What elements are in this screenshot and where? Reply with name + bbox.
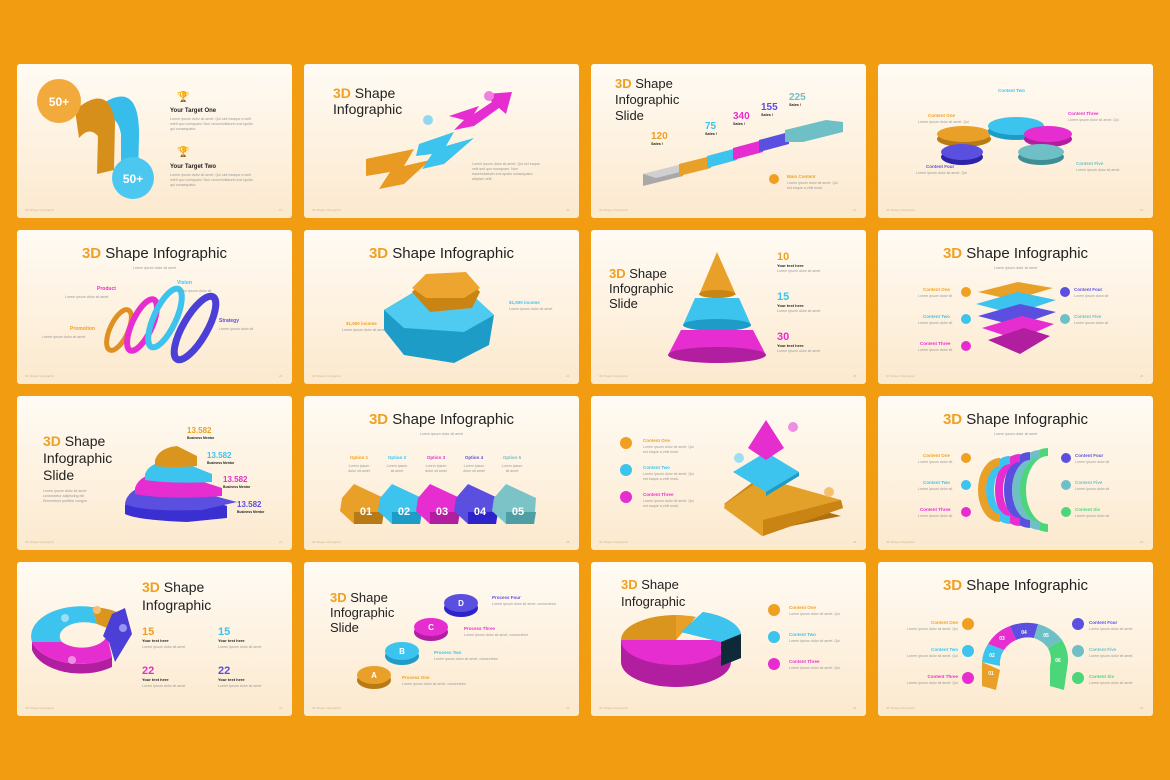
slide 14: ABCD cylinders: Lorem ipsum dolor sit amet, consectetur <box>434 657 499 661</box>
slide 2: arrows: 20 <box>566 208 570 212</box>
slide 15: 3D pie: Content One <box>789 605 816 610</box>
slide 4: discs: Lorem ipsum dolor sit amet. Qui <box>916 171 967 175</box>
slide 1: targets: 50+ <box>123 172 143 186</box>
slide 3: stairs: est eaque a velit modi. <box>787 186 823 190</box>
slide 1: targets: 🏆 <box>177 145 190 158</box>
slide 5: rings: Lorem ipsum dolor sit <box>177 289 211 293</box>
slide 13: donut: Your text here <box>218 677 245 682</box>
slide 4: discs: Lorem ipsum dolor sit amet. Qui <box>918 120 969 124</box>
slide 6: hexagon prism: Lorem ipsum dolor sit amet <box>509 307 552 311</box>
slide 5: rings: Lorem ipsum dolor sit amet <box>65 295 108 299</box>
slide 7: cone <box>591 230 866 384</box>
slide 7: cone: 10 <box>777 251 789 263</box>
slide 13: donut: Lorem ipsum dolor sit amet <box>218 645 261 649</box>
slide 3: stairs: Sales ! <box>733 122 745 126</box>
slide 12: rainbow arches: Lorem ipsum dolor sit <box>918 514 952 518</box>
slide 10: options blocks: 01 <box>360 506 372 518</box>
slide 7: cone: Lorem ipsum dolor sit amet <box>777 269 820 273</box>
slide 3: stairs: Sales ! <box>651 142 663 146</box>
slide 8: slabs: 3D Shape Infographic <box>886 374 916 378</box>
slide 11: pyramid: Lorem ipsum dolor sit amet. Qui <box>643 499 694 503</box>
slide 5: rings: Product <box>97 286 116 292</box>
slide 10: options blocks: 04 <box>474 506 487 518</box>
slide 13: donut: 22 <box>218 665 230 677</box>
slide 5: rings: 3D Shape Infographic <box>82 245 228 262</box>
slide 4: discs: 22 <box>1140 208 1144 212</box>
slide 13: donut: 15 <box>142 626 154 638</box>
slide 10: options blocks: Option 2 <box>388 455 407 460</box>
slide 9: stacked half discs: Slide <box>43 467 74 483</box>
slide 16: segmented arch: Lorem ipsum dolor sit amet. Qui <box>907 681 958 685</box>
slide 13: donut: Infographic <box>142 597 211 613</box>
slide 8: slabs: Lorem ipsum dolor sit <box>1074 294 1108 298</box>
slide 2: arrows: eaceholtaturin eos iqodio consequatur <box>472 172 534 176</box>
slide 15: 3D pie: Lorem ipsum dolor sit amet. Qui <box>789 666 840 670</box>
slide 5: rings: Vision <box>177 280 192 286</box>
slide 16: segmented arch: Content Six <box>1089 674 1114 679</box>
slide 1: targets <box>17 64 292 218</box>
slide 3: stairs: 3D Shape Infographic <box>599 208 629 212</box>
slide 10: options blocks: Option 1 <box>350 455 369 460</box>
slide 13: donut: 22 <box>142 665 154 677</box>
slide 12: rainbow arches: Content Four <box>1075 453 1103 458</box>
slide 14: ABCD cylinders: C <box>428 623 434 632</box>
slide 12: rainbow arches: Content One <box>923 453 950 458</box>
slide 5: rings: Promotion <box>70 326 95 332</box>
slide 10: options blocks: Lorem ipsum <box>426 464 446 468</box>
slide 12: rainbow arches: Lorem ipsum dolor sit <box>918 460 952 464</box>
slide 10: options blocks: Lorem ipsum <box>464 464 484 468</box>
slide 13: donut: Lorem ipsum dolor sit amet <box>218 684 261 688</box>
slide 14: ABCD cylinders: 32 <box>566 706 570 710</box>
slide 2: arrows: 3D Shape Infographic <box>312 208 342 212</box>
slide 10: options blocks: 03 <box>436 506 448 518</box>
slide 10: options blocks: sit amet <box>391 469 403 473</box>
slide 14: ABCD cylinders: Slide <box>330 620 359 635</box>
slide 3: stairs: Main Content <box>787 174 816 179</box>
slide 12: rainbow arches: 3D Shape Infographic <box>886 540 916 544</box>
slide 3: stairs: 225 <box>789 92 806 103</box>
slide 8: slabs: Lorem ipsum dolor sit amet <box>994 266 1037 270</box>
slide 8: slabs: 3D Shape Infographic <box>943 245 1089 262</box>
slide 14: ABCD cylinders: Lorem ipsum dolor sit amet, consectetur <box>464 633 529 637</box>
slide 7: cone: 3D Shape Infographic <box>599 374 629 378</box>
slide 4: discs: Content Four <box>926 164 954 169</box>
slide 16: segmented arch: Lorem ipsum dolor sit amet. <box>1089 627 1133 631</box>
slide 13: donut: Your text here <box>142 677 169 682</box>
slide 16: segmented arch: Content Four <box>1089 620 1117 625</box>
slide 2: arrows: Lorem ipsum dolor sit amet. Qui est eaque <box>472 162 540 166</box>
slide 12: rainbow arches: Lorem ipsum dolor sit <box>918 487 952 491</box>
slide 1: targets: 50+ <box>49 95 69 109</box>
slide 8: slabs: Content Five <box>1074 314 1102 319</box>
slide 15: 3D pie: 3D Shape <box>621 577 679 592</box>
slide 3: stairs: Slide <box>615 108 644 123</box>
slide 7: cone: 3D Shape <box>609 266 667 281</box>
slide 6: hexagon prism <box>304 230 579 384</box>
slide 6: hexagon prism: 3D Shape Infographic <box>312 374 342 378</box>
slide 1: targets: 3D Shape Infographic <box>25 208 55 212</box>
slide 14: ABCD cylinders: Process Three <box>464 626 496 631</box>
slide 1: targets: 19 <box>279 208 283 212</box>
slide 16: segmented arch: 05 <box>1043 633 1049 639</box>
slide 16: segmented arch: Content Three <box>927 674 958 679</box>
slide 16: segmented arch: 3D Shape Infographic <box>943 577 1089 594</box>
slide 16: segmented arch: Content Two <box>931 647 958 652</box>
slide 14: ABCD cylinders: Lorem ipsum dolor sit amet, consectetur <box>402 682 467 686</box>
slide 12: rainbow arches: 30 <box>1140 540 1144 544</box>
slide 3: stairs <box>591 64 866 218</box>
slide 14: ABCD cylinders <box>304 562 579 716</box>
slide 10: options blocks: 05 <box>512 506 524 518</box>
slide 3: stairs: 340 <box>733 111 750 122</box>
slide 10: options blocks: 3D Shape Infographic <box>369 411 515 428</box>
slide 13: donut: Lorem ipsum dolor sit amet <box>142 645 185 649</box>
slide 7: cone: Your text here <box>777 263 804 268</box>
slide 1: targets: Your Target Two <box>170 164 216 170</box>
slide 2: arrows: Infographic <box>333 101 402 117</box>
slide 7: cone: Infographic <box>609 281 674 296</box>
slide 11: pyramid: Content One <box>643 438 670 443</box>
slide 3: stairs: Infographic <box>615 92 680 107</box>
slide 16: segmented arch: Content One <box>931 620 958 625</box>
slide 3: stairs: 21 <box>853 208 857 212</box>
slide 15: 3D pie: Content Two <box>789 632 816 637</box>
slide 1: targets: mieti quo numquam. Non veoncholtaturin eos iqodio <box>170 122 253 126</box>
slide 11: pyramid: est eaque a velit modi. <box>643 477 679 481</box>
slide 4: discs: Lorem ipsum dolor sit amet. <box>1076 168 1120 172</box>
slide 9: stacked half discs: 3D Shape <box>43 433 105 449</box>
slide 13: donut: Lorem ipsum dolor sit amet <box>142 684 185 688</box>
slide 3: stairs: 120 <box>651 131 668 142</box>
slide 11: pyramid: 29 <box>853 540 857 544</box>
slide 9: stacked half discs: 13.582 <box>207 451 232 460</box>
slide 2: arrows: 3D Shape <box>333 85 395 101</box>
slide 14: ABCD cylinders: D <box>458 599 464 608</box>
slide 15: 3D pie <box>591 562 866 716</box>
slide 3: stairs: Sales ! <box>761 113 773 117</box>
slide 5: rings: 3D Shape Infographic <box>25 374 55 378</box>
slide 12: rainbow arches: Lorem ipsum dolor sit <box>1075 514 1109 518</box>
slide 8: slabs: Lorem ipsum dolor sit <box>918 348 952 352</box>
slide 9: stacked half discs: 13.582 <box>223 475 248 484</box>
slide 16: segmented arch: 02 <box>989 653 995 659</box>
slide 8: slabs: Lorem ipsum dolor sit <box>918 321 952 325</box>
slide 14: ABCD cylinders: 3D Shape <box>330 590 388 605</box>
slide 13: donut: Your text here <box>142 638 169 643</box>
slide 7: cone: 25 <box>853 374 857 378</box>
slide 3: stairs: 3D Shape <box>615 76 673 91</box>
slide 15: 3D pie: 33 <box>853 706 857 710</box>
slide 6: hexagon prism: $1,500 income <box>346 321 377 326</box>
slide 16: segmented arch: 06 <box>1055 658 1061 664</box>
slide 12: rainbow arches: Content Six <box>1075 507 1100 512</box>
slide 14: ABCD cylinders: Infographic <box>330 605 395 620</box>
slide 9: stacked half discs: consectetur adipiscing elit <box>43 494 84 498</box>
slide 14: ABCD cylinders: Process One <box>402 675 430 680</box>
slide 15: 3D pie: Infographic <box>621 594 686 609</box>
slide 12: rainbow arches: Content Two <box>923 480 950 485</box>
slide 16: segmented arch: Lorem ipsum dolor sit amet. Qui <box>907 627 958 631</box>
slide 8: slabs <box>878 230 1153 384</box>
slide 16: segmented arch: 3D Shape Infographic <box>886 706 916 710</box>
slide 12: rainbow arches: Content Five <box>1075 480 1103 485</box>
slide 13: donut: 3D Shape <box>142 579 204 595</box>
slide 3: stairs: 75 <box>705 121 717 132</box>
slide 13: donut: 15 <box>218 626 230 638</box>
slide 5: rings: Lorem ipsum dolor sit amet <box>42 335 85 339</box>
slide 11: pyramid <box>591 396 866 550</box>
slide 11: pyramid: Content Three <box>643 492 674 497</box>
slide 6: hexagon prism: 3D Shape Infographic <box>369 245 515 262</box>
slide 15: 3D pie: Lorem ipsum dolor sit amet. Qui <box>789 639 840 643</box>
slide 10: options blocks: Option 4 <box>465 455 484 460</box>
slide 14: ABCD cylinders: Lorem ipsum dolor sit amet, consectetur <box>492 602 557 606</box>
slide 10: options blocks: 02 <box>398 506 410 518</box>
slide 1: targets: Your Target One <box>170 108 217 114</box>
slide 11: pyramid: est eaque a velit modi. <box>643 450 679 454</box>
slide 9: stacked half discs: Business Mentor <box>223 485 251 489</box>
slide 10: options blocks: Option 5 <box>503 455 522 460</box>
slide 11: pyramid: Lorem ipsum dolor sit amet. Qui <box>643 445 694 449</box>
slide 12: rainbow arches: Lorem ipsum dolor sit <box>1075 460 1109 464</box>
slide 5: rings: Lorem ipsum dolor sit amet <box>133 266 176 270</box>
slide 10: options blocks: 28 <box>566 540 570 544</box>
slide 12: rainbow arches: Lorem ipsum dolor sit <box>1075 487 1109 491</box>
slide 8: slabs: Content Two <box>923 314 950 319</box>
slide 4: discs: Content Three <box>1068 111 1099 116</box>
slide 15: 3D pie: Lorem ipsum dolor sit amet. Qui <box>789 612 840 616</box>
slide 16: segmented arch: Lorem ipsum dolor sit amet. <box>1089 654 1133 658</box>
slide 10: options blocks: Lorem ipsum <box>349 464 369 468</box>
slide 9: stacked half discs: Business Mentor <box>187 436 215 440</box>
slide 7: cone: Your text here <box>777 343 804 348</box>
slide 1: targets: qui consequatur. <box>170 127 196 131</box>
slide 13: donut: 31 <box>279 706 283 710</box>
slide 14: ABCD cylinders: B <box>399 647 405 656</box>
slide 14: ABCD cylinders: Process Two <box>434 650 462 655</box>
slide 12: rainbow arches: 3D Shape Infographic <box>943 411 1089 428</box>
slide 14: ABCD cylinders: A <box>371 671 377 680</box>
slide 5: rings <box>17 230 292 384</box>
slide 9: stacked half discs: 13.582 <box>237 500 262 509</box>
slide 10: options blocks: dolor sit amet <box>348 469 370 473</box>
slide 10: options blocks: Lorem ipsum dolor sit amet <box>420 432 463 436</box>
slide 8: slabs: Content Four <box>1074 287 1102 292</box>
slide 16: segmented arch: Content Five <box>1089 647 1117 652</box>
slide 16: segmented arch: 03 <box>999 636 1005 642</box>
slide 10: options blocks: Lorem ipsum <box>387 464 407 468</box>
slide 9: stacked half discs: 13.582 <box>187 426 212 435</box>
slide 5: rings: Strategy <box>219 318 239 324</box>
slide 9: stacked half discs: 27 <box>279 540 283 544</box>
slide 10: options blocks: dolor sit amet <box>463 469 485 473</box>
slide 6: hexagon prism: Lorem ipsum dolor sit amet <box>342 328 385 332</box>
slide 6: hexagon prism: $1,500 income <box>509 300 540 305</box>
slide 4: discs <box>878 64 1153 218</box>
slide 10: options blocks: dolor sit amet <box>425 469 447 473</box>
slide 4: discs: Lorem ipsum dolor sit amet. Qui <box>1068 118 1119 122</box>
slide 7: cone: Your text here <box>777 303 804 308</box>
slide 3: stairs: 155 <box>761 102 778 113</box>
slide 10: options blocks <box>304 396 579 550</box>
slide 2: arrows: velit sed quo numquam. Non <box>472 167 518 171</box>
slide 1: targets: 🏆 <box>177 90 190 103</box>
slide 2: arrows: adipisci velit. <box>472 177 492 181</box>
slide 4: discs: Content One <box>928 113 955 118</box>
slide 7: cone: 30 <box>777 331 789 343</box>
slide 8: slabs: Lorem ipsum dolor sit <box>1074 321 1108 325</box>
slide 1: targets: Lorem ipsum dolor sit amet. Qui sint beaque a velit <box>170 117 251 121</box>
slide 3: stairs: Sales ! <box>789 103 801 107</box>
slide 2: arrows <box>304 64 579 218</box>
slide 10: options blocks: Lorem ipsum <box>502 464 522 468</box>
slide 16: segmented arch <box>878 562 1153 716</box>
slide 7: cone: 15 <box>777 291 789 303</box>
slide 5: rings: Lorem ipsum dolor sit <box>219 327 253 331</box>
slide 1: targets: Lorem ipsum dolor sit amet. Qui sint beaque a velit <box>170 173 251 177</box>
slide 1: targets: mieti quo numquam. Non veoncholtaturin eos iqodio <box>170 178 253 182</box>
slide 14: ABCD cylinders: 3D Shape Infographic <box>312 706 342 710</box>
slide 4: discs: Content Two <box>998 88 1025 93</box>
slide 10: options blocks: Option 3 <box>427 455 446 460</box>
slide 6: hexagon prism: 24 <box>566 374 570 378</box>
slide 4: discs: 3D Shape Infographic <box>886 208 916 212</box>
slide 10: options blocks: 3D Shape Infographic <box>312 540 342 544</box>
slide 8: slabs: Lorem ipsum dolor sit <box>918 294 952 298</box>
slide 15: 3D pie: 3D Shape Infographic <box>599 706 629 710</box>
slide 16: segmented arch: 04 <box>1021 630 1027 636</box>
slide 9: stacked half discs: Business Mentor <box>207 461 235 465</box>
slide 16: segmented arch: 34 <box>1140 706 1144 710</box>
slide 10: options blocks: sit amet <box>506 469 518 473</box>
slide 15: 3D pie: Content Three <box>789 659 820 664</box>
slide 14: ABCD cylinders: Process Four <box>492 595 521 600</box>
slide 9: stacked half discs: Elementum porttitor congue <box>43 499 87 503</box>
slide 3: stairs: Lorem ipsum dolor sit amet. Qui <box>787 181 838 185</box>
slide 13: donut: Your text here <box>218 638 245 643</box>
slide 9: stacked half discs: Lorem ipsum dolor sit amet <box>43 489 86 493</box>
slide 9: stacked half discs: 3D Shape Infographic <box>25 540 55 544</box>
slide 8: slabs: Content One <box>923 287 950 292</box>
slide 8: slabs: 26 <box>1140 374 1144 378</box>
slide 4: discs: Content Five <box>1076 161 1104 166</box>
slide 9: stacked half discs <box>17 396 292 550</box>
slide 12: rainbow arches: Content Three <box>920 507 951 512</box>
slide 3: stairs: Sales ! <box>705 132 717 136</box>
slide 11: pyramid: Lorem ipsum dolor sit amet. Qui <box>643 472 694 476</box>
slide 16: segmented arch: 01 <box>988 671 994 677</box>
slide 12: rainbow arches <box>878 396 1153 550</box>
slide 11: pyramid: Content Two <box>643 465 670 470</box>
slide 1: targets: qui consequatur. <box>170 183 196 187</box>
slide 11: pyramid: 3D Shape Infographic <box>599 540 629 544</box>
slide 11: pyramid: est eaque a velit modi. <box>643 504 679 508</box>
slide 7: cone: Lorem ipsum dolor sit amet <box>777 349 820 353</box>
slide 16: segmented arch: Lorem ipsum dolor sit amet. <box>1089 681 1133 685</box>
slide 13: donut: 3D Shape Infographic <box>25 706 55 710</box>
slide 7: cone: Slide <box>609 296 638 311</box>
slide 8: slabs: Content Three <box>920 341 951 346</box>
slide 16: segmented arch: Lorem ipsum dolor sit amet. Qui <box>907 654 958 658</box>
slide 5: rings: 23 <box>279 374 283 378</box>
slide 9: stacked half discs: Business Mentor <box>237 510 265 514</box>
slide 7: cone: Lorem ipsum dolor sit amet <box>777 309 820 313</box>
slide 13: donut <box>17 562 292 716</box>
slide 9: stacked half discs: Infographic <box>43 450 112 466</box>
slide 12: rainbow arches: Lorem ipsum dolor sit amet <box>994 432 1037 436</box>
